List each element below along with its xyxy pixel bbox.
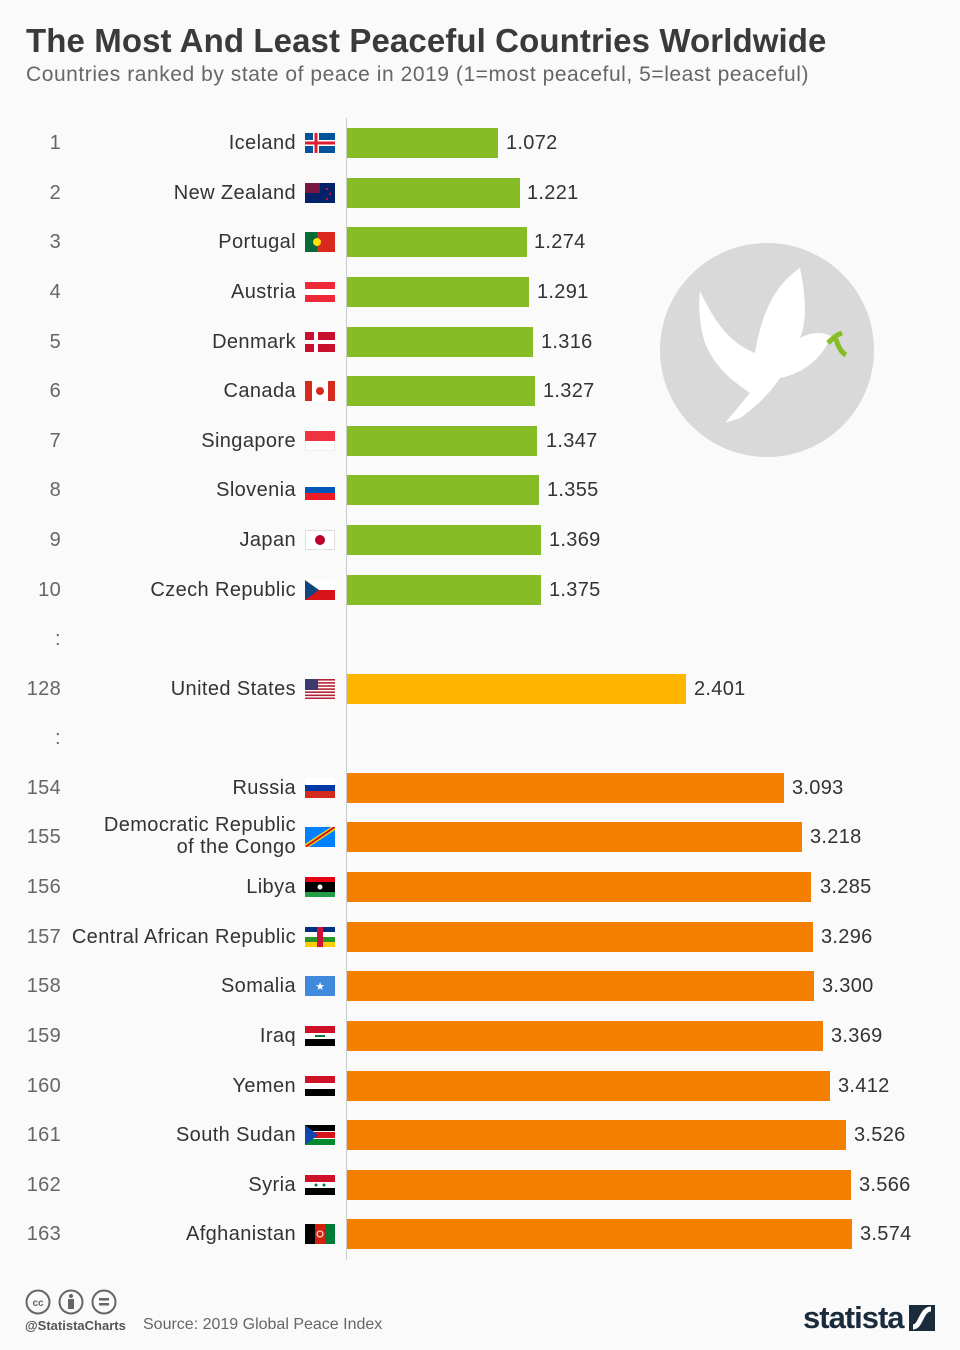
row 5: 5 [50, 331, 61, 353]
row 4 [50, 277, 589, 307]
row 155: 3.218 [810, 826, 862, 848]
row 158 [27, 971, 874, 1001]
row 158: 3.300 [822, 975, 874, 997]
row 160: Yemen [232, 1075, 296, 1097]
row 6 [50, 376, 595, 406]
row 9 [50, 525, 601, 555]
row 1: 1.072 [506, 132, 558, 154]
row 9: 1.369 [549, 529, 601, 551]
row 161: 161 [27, 1124, 61, 1146]
row 163 [27, 1219, 912, 1249]
row 163: 3.574 [860, 1223, 912, 1245]
row 3: 1.274 [534, 231, 586, 253]
row 155: Democratic Republic [104, 814, 296, 836]
row 162: 162 [27, 1174, 61, 1196]
row 128: 128 [27, 678, 61, 700]
row 159: 3.369 [831, 1025, 883, 1047]
row 154 [27, 773, 844, 803]
row 10 [38, 575, 601, 605]
row 161: South Sudan [176, 1124, 296, 1146]
row 158: 158 [27, 975, 61, 997]
row 157 [27, 922, 873, 952]
row 157: 157 [27, 926, 61, 948]
row 1: Iceland [229, 132, 296, 154]
row 7: 1.347 [546, 430, 598, 452]
row 10: Czech Republic [150, 579, 296, 601]
title: The Most And Least Peaceful Countries Worldwide [26, 22, 826, 59]
row 162: 3.566 [859, 1174, 911, 1196]
row 10: 1.375 [549, 579, 601, 601]
row 128: United States [171, 678, 296, 700]
row 128 [27, 674, 746, 704]
row 128: 2.401 [694, 678, 746, 700]
row 162 [27, 1170, 911, 1200]
row 3 [50, 227, 586, 257]
row 1: 1 [50, 132, 61, 154]
row 155 [27, 814, 862, 858]
icon: cc license: cc [32, 1298, 44, 1309]
row 9: 9 [50, 529, 61, 551]
row 156: Libya [246, 876, 296, 898]
row 161: 3.526 [854, 1124, 906, 1146]
row 4: 4 [50, 281, 61, 303]
icon: cc license [26, 1290, 116, 1314]
row 156 [27, 872, 872, 902]
row 3: Portugal [218, 231, 296, 253]
row 3: 3 [50, 231, 61, 253]
row 7: 7 [50, 430, 61, 452]
row 161 [27, 1120, 906, 1150]
row 2: 2 [50, 182, 61, 204]
row 160: 3.412 [838, 1075, 890, 1097]
row 1 [50, 128, 558, 158]
row 160 [27, 1071, 890, 1101]
row 5: 1.316 [541, 331, 593, 353]
subtitle: Countries ranked by state of peace in 2019 (1=most peaceful, 5=least peaceful) [26, 63, 809, 86]
row 157: 3.296 [821, 926, 873, 948]
row 2: 1.221 [527, 182, 579, 204]
row 159: Iraq [260, 1025, 296, 1047]
row 4: Austria [231, 281, 296, 303]
axis line [346, 118, 347, 1260]
row 8 [50, 475, 599, 505]
row 162: Syria [248, 1174, 296, 1196]
row 163: Afghanistan [186, 1223, 296, 1245]
ellipsis: : [55, 727, 61, 749]
row 154: 154 [27, 777, 61, 799]
ellipsis: : [55, 628, 61, 650]
row 159 [27, 1021, 883, 1051]
row 160: 160 [27, 1075, 61, 1097]
row 2 [50, 178, 579, 208]
row 8: 1.355 [547, 479, 599, 501]
icon: dove [660, 243, 874, 457]
row 156: 156 [27, 876, 61, 898]
row 158: ★ [315, 981, 325, 993]
row 6: Canada [224, 380, 296, 402]
row 154: 3.093 [792, 777, 844, 799]
row 5: Denmark [212, 331, 296, 353]
row 8: 8 [50, 479, 61, 501]
row 10: 10 [38, 579, 61, 601]
logo: statista: statista [803, 1300, 904, 1335]
row 9: Japan [240, 529, 296, 551]
row 154: Russia [232, 777, 296, 799]
row 155: of the Congo [177, 836, 296, 858]
row 5 [50, 327, 593, 357]
row 8: Slovenia [216, 479, 296, 501]
handle: @StatistaCharts [25, 1318, 126, 1333]
row 163: 163 [27, 1223, 61, 1245]
row 4: 1.291 [537, 281, 589, 303]
row 156: 3.285 [820, 876, 872, 898]
row 7: Singapore [201, 430, 296, 452]
row 6: 6 [50, 380, 61, 402]
row 157: Central African Republic [72, 926, 296, 948]
source: Source: 2019 Global Peace Index [143, 1316, 382, 1333]
row 158: Somalia [221, 975, 296, 997]
row 2: New Zealand [174, 182, 296, 204]
row 7 [50, 426, 598, 456]
row 6: 1.327 [543, 380, 595, 402]
row 159: 159 [27, 1025, 61, 1047]
row 155: 155 [27, 826, 61, 848]
